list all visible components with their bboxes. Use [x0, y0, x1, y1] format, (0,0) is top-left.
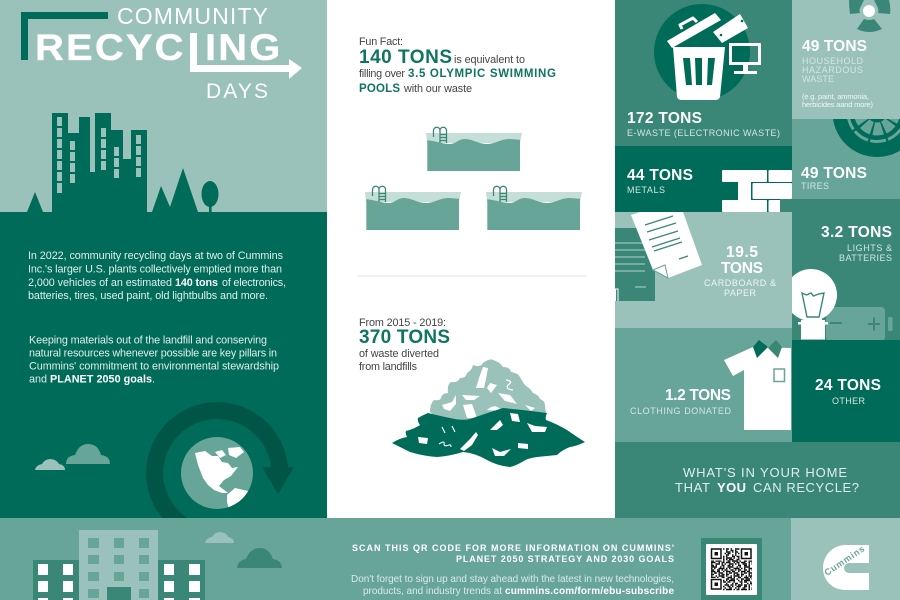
text block: QR code information	[351, 543, 674, 597]
text block: stewardship commitment: Keeping materials out of the landfill and conserving	[29, 334, 267, 346]
panel: bottom band	[0, 518, 791, 600]
panel: household hazardous waste: 49 TONS	[802, 38, 867, 55]
panel: other	[792, 340, 900, 442]
text block: fun fact: Fun Fact:	[359, 36, 403, 48]
icon: circular arrow around globe	[155, 411, 294, 530]
icon: hazard symbol	[849, 0, 890, 32]
panel: household hazardous waste: herbicides aand more)	[802, 100, 874, 109]
panel: clothing donated: CLOTHING DONATED	[630, 406, 732, 416]
text block: stewardship commitment: PLANET 2050 goals	[50, 374, 152, 386]
panel: lights and batteries: BATTERIES	[839, 253, 892, 263]
panel: clothing donated	[615, 328, 792, 442]
panel: metals: METALS	[627, 185, 665, 195]
panel: e-waste: 172 TONS	[627, 110, 702, 127]
text block: stewardship commitment	[29, 334, 279, 386]
title: Community Recycling Days: COMMUNITY	[117, 3, 268, 29]
illustration: waste pile	[392, 359, 585, 467]
arrow forming the letter L	[190, 33, 302, 79]
panel: tires: 49 TONS	[801, 165, 867, 182]
text block: fun fact: 140 TONS	[359, 47, 452, 68]
panel: tires	[792, 119, 900, 199]
panel: clothing donated: 1.2 TONS	[665, 387, 731, 404]
text block: stewardship commitment: natural resources whenever possible are key pillars in	[29, 348, 277, 360]
icon: steel beams and bricks	[722, 170, 792, 212]
panel: Cummins logo background	[791, 518, 900, 600]
panel: e-waste	[615, 0, 792, 146]
panel: tires: TIRES	[801, 181, 829, 191]
panel: white centre background	[327, 0, 615, 518]
title: Community Recycling Days: ING	[205, 27, 283, 69]
text block: QR code information: SCAN THIS QR CODE FOR MORE INFORMATION ON CUMMINS'	[352, 543, 674, 553]
icon: battery	[826, 307, 892, 341]
text block: fun fact: filling over	[359, 68, 405, 80]
panel: other: 24 TONS	[815, 377, 881, 394]
text block: QR code information: PLANET 2050 STRATEGY AND 2030 GOALS	[456, 554, 674, 564]
text block: stewardship commitment: .	[152, 374, 155, 386]
icon: light bulb	[792, 269, 837, 340]
panel: other: OTHER	[832, 396, 866, 406]
text block: waste diverted: 370 TONS	[359, 327, 450, 348]
text block: waste diverted	[359, 317, 450, 373]
panel: metals: 44 TONS	[627, 167, 693, 184]
text block: QR code information: Don't forget to sign up and stay ahead with the latest in new technologies,	[351, 574, 674, 585]
text block: 2022 recycling summary: of electronics,	[222, 277, 286, 289]
text block: 2022 recycling summary: Inc.'s larger U.S. plants collectively emptied more than	[28, 264, 282, 276]
panel: e-waste: E-WASTE (ELECTRONIC WASTE)	[627, 128, 780, 138]
text block: 2022 recycling summary: 140 tons	[175, 277, 218, 289]
panel: household hazardous waste: HOUSEHOLD	[802, 56, 864, 66]
panel: call to action: YOU	[717, 480, 746, 495]
panel: lights and batteries	[780, 199, 900, 341]
text block: fun fact: 3.5 OLYMPIC SWIMMING	[408, 68, 556, 80]
text block: waste diverted: from landfills	[359, 361, 418, 373]
logo: Cummins	[823, 544, 869, 590]
icon: trash can with devices	[654, 4, 760, 100]
panel: call to action: WHAT'S IN YOUR HOME	[683, 465, 847, 480]
panel: lights and batteries: LIGHTS &	[847, 243, 892, 253]
icon: paper sheet	[631, 212, 702, 278]
icon: polo shirt	[724, 340, 791, 430]
text block: waste diverted: From 2015 - 2019:	[359, 317, 446, 329]
text block: fun fact	[359, 36, 556, 95]
icon: swimming pools	[365, 127, 582, 230]
panel: metals	[615, 146, 792, 212]
icon: globe	[181, 437, 253, 510]
title: Community Recycling Days: RECYC	[35, 27, 186, 69]
icon: envelope folder	[615, 228, 655, 301]
text block: fun fact: with our waste	[403, 83, 472, 95]
text block: fun fact: POOLS	[359, 83, 400, 95]
panel: cardboard and paper: TONS	[721, 260, 763, 277]
text block: QR code information: cummins.com/form/ebu-subscribe	[505, 586, 674, 597]
logo: Cummins: Cummins	[823, 544, 866, 578]
panel: left dark text area	[0, 212, 327, 518]
panel: lights and batteries: 3.2 TONS	[821, 224, 892, 241]
panel: call to action	[615, 442, 900, 518]
panel: left sky	[0, 0, 327, 212]
panel: cardboard and paper: CARDBOARD &	[704, 278, 776, 288]
panel: call to action: CAN RECYCLE?	[753, 480, 859, 495]
title: Community Recycling Days	[21, 3, 302, 103]
panel: cardboard and paper: 19.5	[726, 244, 758, 261]
text block: 2022 recycling summary: 2,000 vehicles of an estimated	[28, 277, 172, 289]
icon: clouds on dark panel	[35, 444, 110, 470]
panel: cardboard and paper: PAPER	[724, 288, 756, 298]
illustration: city skyline	[27, 113, 218, 212]
text block: 2022 recycling summary: batteries, tires, used paint, old lightbulbs and more.	[28, 290, 268, 302]
QR code	[701, 538, 762, 600]
panel: household hazardous waste: WASTE	[802, 74, 834, 84]
text block: fun fact: is equivalent to	[454, 54, 525, 66]
panel: household hazardous waste: (e.g. paint, ammonia,	[802, 92, 869, 101]
panel: household hazardous waste: HAZARDOUS	[802, 65, 863, 75]
icon: clouds on bottom band	[205, 532, 282, 568]
panel: cardboard and paper	[615, 212, 792, 328]
title: Community Recycling Days: DAYS	[206, 80, 268, 103]
text block: waste diverted: of waste diverted	[359, 348, 439, 360]
text block: 2022 recycling summary: In 2022, community recycling days at two of Cummins	[28, 250, 284, 262]
text block: QR code information: products, and industry trends at	[363, 586, 502, 597]
illustration: office building	[33, 530, 205, 600]
text block: 2022 recycling summary	[28, 250, 286, 302]
text block: stewardship commitment: Cummins' commitment to environmental stewardship	[29, 360, 279, 372]
icon: tire	[833, 119, 900, 157]
text block: stewardship commitment: and	[29, 374, 47, 386]
panel: call to action: THAT	[675, 480, 710, 495]
panel: household hazardous waste	[792, 0, 900, 119]
